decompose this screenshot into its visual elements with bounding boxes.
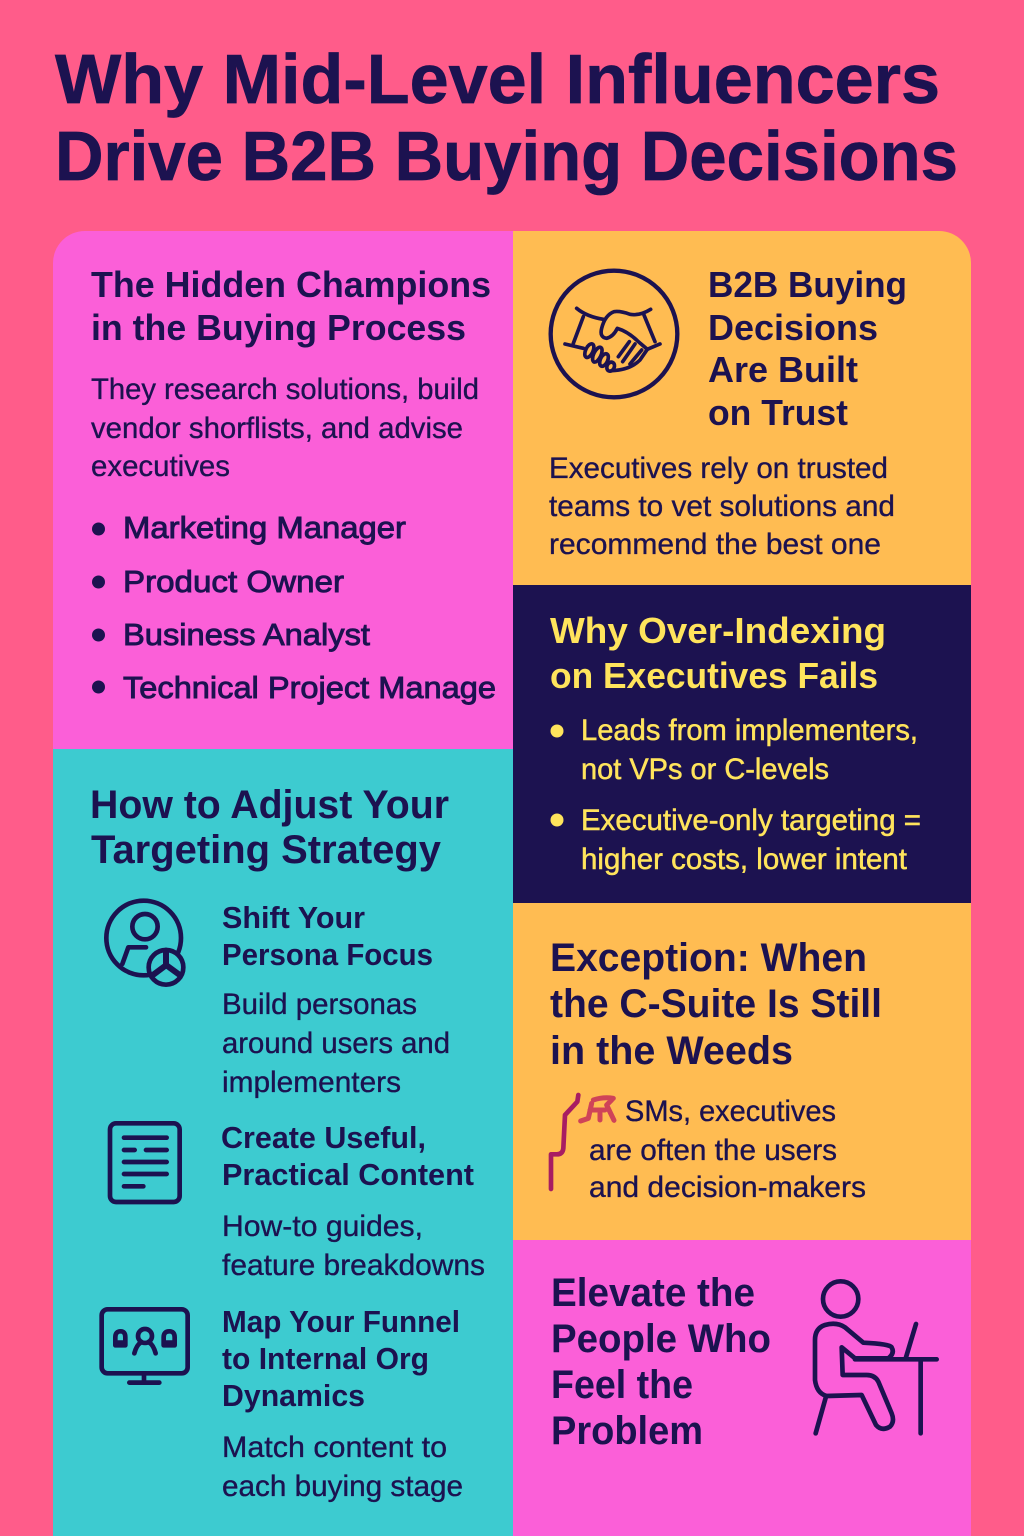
list: over-indexing points: higher costs, lower intent: [581, 843, 908, 876]
panel: why over-indexing fails: [513, 585, 971, 903]
panel: exception c-suite: [513, 903, 971, 1240]
panel: the hidden champions: [53, 231, 513, 749]
text: map your funnel: to Internal Org: [222, 1341, 429, 1376]
text: map your funnel: each buying stage: [222, 1470, 463, 1503]
list: mid-level roles: Technical Project Manage: [123, 670, 496, 705]
list: mid-level roles: Business Analyst: [123, 617, 370, 652]
text: create useful content: Create Useful,: [221, 1120, 426, 1155]
text: shift your persona focus: Shift Your: [222, 900, 365, 935]
heading: targeting strategy: [90, 783, 449, 872]
text: trust description: Executives rely on trusted: [549, 452, 888, 485]
heading: exception: the C-Suite Is Still: [550, 982, 882, 1026]
text: shift your persona focus: Persona Focus: [222, 937, 433, 972]
list: mid-level roles: Marketing Manager: [123, 510, 406, 545]
list: over-indexing points: not VPs or C-levels: [581, 753, 829, 786]
icon: persona with steering wheel: [106, 901, 183, 985]
text: hidden champions description: vendor shorflists, and advise: [91, 412, 463, 445]
heading: elevate: People Who: [551, 1317, 771, 1361]
list: over-indexing points: Leads from implementers,: [581, 714, 918, 747]
icon: garbled maroon glyph: [551, 1095, 614, 1189]
heading: built on trust: on Trust: [708, 392, 848, 433]
heading: targeting strategy: Targeting Strategy: [91, 828, 442, 872]
heading: exception: Exception: When: [550, 936, 867, 980]
heading: elevate: [551, 1271, 771, 1453]
text: shift your persona focus: implementers: [222, 1066, 401, 1099]
text: exception description: [589, 1095, 866, 1204]
panel: elevate the people: [513, 1240, 971, 1536]
heading: exception: in the Weeds: [550, 1029, 793, 1073]
heading: targeting strategy: How to Adjust Your: [90, 783, 449, 827]
title: Drive B2B Buying Decisions: [55, 117, 958, 195]
text: exception description: and decision-makers: [589, 1171, 866, 1204]
heading: hidden champions: [91, 264, 491, 348]
text: trust description: teams to vet solutions and: [549, 490, 895, 523]
text: map your funnel: Dynamics: [222, 1378, 365, 1413]
text: create useful content: How-to guides,: [222, 1210, 423, 1243]
panel: built on trust: [513, 231, 971, 585]
heading: built on trust: Are Built: [708, 349, 858, 390]
heading: elevate: Feel the: [551, 1363, 693, 1407]
text: trust description: [549, 452, 895, 561]
heading: over-indexing: [550, 610, 886, 696]
icon: monitor with three people: [102, 1309, 188, 1383]
title: Why Mid-Level Influencers: [55, 40, 940, 118]
icon: document: [110, 1123, 180, 1202]
heading: elevate: Problem: [551, 1409, 703, 1453]
heading: hidden champions: The Hidden Champions: [91, 264, 491, 305]
text: shift your persona focus: Build personas: [222, 988, 417, 1021]
list: mid-level roles: [92, 510, 496, 705]
text: map your funnel: [222, 1304, 463, 1503]
text: map your funnel: Map Your Funnel: [222, 1304, 460, 1339]
heading: over-indexing: on Executives Fails: [550, 655, 878, 696]
text: create useful content: feature breakdowns: [222, 1249, 485, 1282]
heading: exception: [550, 936, 882, 1073]
title: [55, 40, 958, 195]
icon: person at desk: [815, 1281, 937, 1433]
text: create useful content: Practical Content: [222, 1157, 474, 1192]
text: hidden champions description: [91, 373, 479, 483]
panel: how to adjust your targeting strategy: [53, 749, 513, 1536]
list: over-indexing points: [550, 714, 921, 876]
text: trust description: recommend the best one: [549, 528, 881, 561]
text: hidden champions description: They research solutions, build: [91, 373, 479, 406]
heading: built on trust: B2B Buying: [708, 264, 907, 305]
text: shift your persona focus: [222, 900, 450, 1099]
heading: built on trust: [708, 264, 907, 433]
list: over-indexing points: Executive-only targeting =: [581, 804, 921, 837]
heading: over-indexing: Why Over-Indexing: [550, 610, 886, 651]
heading: built on trust: Decisions: [708, 307, 878, 348]
icon: handshake in circle: [551, 271, 677, 397]
text: create useful content: [221, 1120, 485, 1282]
text: shift your persona focus: around users and: [222, 1027, 450, 1060]
text: hidden champions description: executives: [91, 450, 230, 483]
list: mid-level roles: Product Owner: [123, 564, 344, 599]
text: exception description: SMs, executives: [625, 1095, 836, 1128]
text: exception description: are often the users: [589, 1134, 837, 1167]
text: map your funnel: Match content to: [222, 1431, 447, 1464]
heading: hidden champions: in the Buying Process: [91, 307, 466, 348]
heading: elevate: Elevate the: [551, 1271, 755, 1315]
